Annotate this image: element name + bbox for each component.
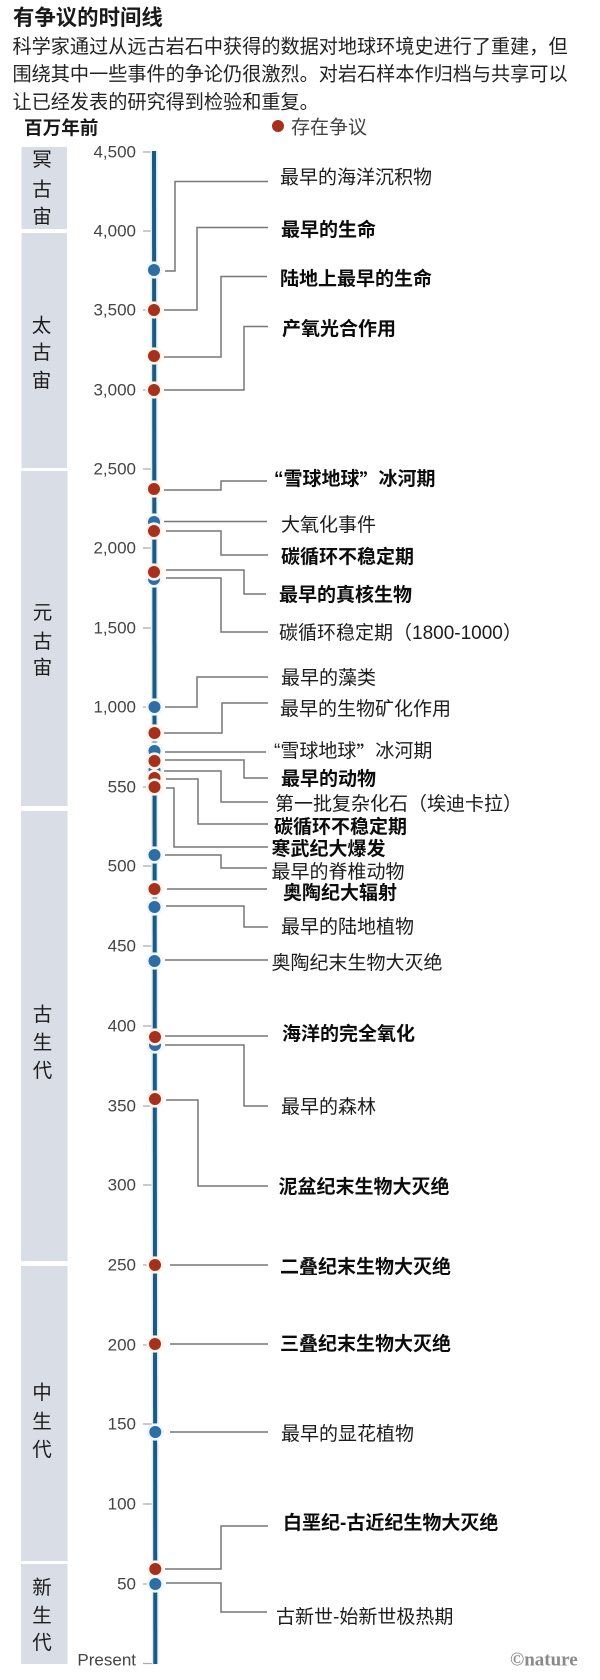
- event: great oxidation: 大氧化事件: [281, 514, 376, 536]
- time axis with ticks: 400: [108, 1016, 136, 1036]
- event: earliest forests: [165, 1045, 376, 1118]
- event: earliest vertebrates: 最早的脊椎动物: [272, 861, 405, 883]
- era: Hadean: 古: [32, 179, 52, 201]
- event: earliest vertebrates: [165, 855, 405, 883]
- event: Cambrian explosion: [166, 788, 386, 860]
- era: Mesozoic: 代: [32, 1439, 52, 1461]
- title: 有争议的时间线: [13, 6, 163, 30]
- era: Cenozoic: 新: [32, 1577, 52, 1599]
- event: oxygenic photosynthesis: 产氧光合作用: [282, 318, 396, 340]
- event: PETM: [166, 1583, 453, 1628]
- intro text: 让已经发表的研究得到检验和重复。: [12, 92, 319, 114]
- time axis with ticks: 500: [108, 856, 136, 876]
- era: Archean: 古: [32, 342, 51, 364]
- time axis with ticks: 1,500: [93, 618, 136, 638]
- event: end-Permian extinction: 二叠纪末生物大灭绝: [280, 1255, 451, 1278]
- era: Paleozoic: [21, 811, 68, 1261]
- event: earliest forests: 最早的森林: [281, 1096, 376, 1118]
- time axis with ticks: Present: [77, 1650, 136, 1670]
- event: earliest animals: [165, 760, 376, 790]
- era: Archean: 太: [32, 315, 51, 337]
- event: earliest flowering plants: 最早的显花植物: [281, 1423, 414, 1445]
- intro text: 科学家通过从远古岩石中获得的数据对地球环境史进行了重建，但: [12, 36, 568, 58]
- event: oxygenic photosynthesis: [164, 318, 396, 390]
- event: end-Triassic extinction: 三叠纪末生物大灭绝: [280, 1332, 451, 1355]
- event: earliest life on land: [164, 267, 432, 357]
- event: first complex fossils: 第一批复杂化石（埃迪卡拉）: [275, 793, 522, 815]
- time axis with ticks: 150: [108, 1414, 136, 1434]
- era: Archean: [22, 233, 67, 468]
- time axis with ticks: 3,000: [93, 380, 136, 400]
- event: PETM: 古新世-始新世极热期: [276, 1606, 453, 1628]
- time axis with ticks: 4,500: [93, 142, 136, 162]
- era: Paleozoic: 生: [33, 1032, 52, 1054]
- event: snowball earth 1: [164, 466, 436, 493]
- axis heading: 百万年前: [24, 118, 98, 138]
- event: K-Pg extinction: [165, 1511, 498, 1569]
- time axis with ticks: 350: [108, 1096, 136, 1116]
- time axis with ticks: 100: [108, 1494, 136, 1514]
- event: snowball earth 2: “雪球地球”冰河期: [274, 738, 432, 765]
- time axis with ticks: 450: [108, 936, 136, 956]
- era: Cenozoic: [21, 1564, 68, 1664]
- time axis with ticks: 250: [108, 1256, 136, 1274]
- event: earliest biomineralization: [164, 698, 451, 733]
- event: K-Pg extinction: 白垩纪-古近纪生物大灭绝: [283, 1511, 498, 1534]
- event: carbon cycle instability 2: [166, 779, 407, 838]
- era: Cenozoic: 代: [32, 1632, 52, 1654]
- event: earliest land plants: 最早的陆地植物: [281, 916, 414, 938]
- time axis with ticks: 3,500: [93, 300, 136, 320]
- event: carbon cycle stability: 碳循环稳定期（1800-1000）: [279, 622, 522, 644]
- era: Mesozoic: [21, 1266, 68, 1561]
- era: Paleozoic: 代: [33, 1060, 52, 1082]
- time axis with ticks: 50: [117, 1574, 136, 1594]
- time axis with ticks: 2,500: [93, 460, 136, 478]
- era: Cenozoic: 生: [32, 1605, 52, 1627]
- event: earliest ocean sediments: [165, 166, 432, 271]
- event: carbon cycle instability 1: 碳循环不稳定期: [281, 545, 414, 568]
- era: Proterozoic: 古: [33, 631, 52, 653]
- event markers: [147, 263, 163, 1591]
- event: full ocean oxygenation: 海洋的完全氧化: [282, 1022, 415, 1045]
- event: Ordovician radiation: 奥陶纪大辐射: [283, 881, 397, 904]
- time axis with ticks: 4,000: [93, 222, 136, 240]
- era: Hadean: 宙: [32, 206, 52, 228]
- time axis with ticks: 1,000: [93, 698, 136, 716]
- event: earliest biomineralization: 最早的生物矿化作用: [280, 698, 451, 720]
- time axis with ticks: 300: [108, 1176, 136, 1194]
- era: Proterozoic: [21, 471, 68, 806]
- time axis with ticks: 2,000: [93, 538, 136, 558]
- event: earliest algae: 最早的藻类: [281, 667, 376, 689]
- event: earliest animals: 最早的动物: [281, 768, 376, 790]
- legend: disputed: 存在争议: [291, 116, 367, 138]
- event: carbon cycle instability 1: [166, 531, 414, 568]
- event: earliest life on land: 陆地上最早的生命: [280, 267, 432, 290]
- intro text: 围绕其中一些事件的争论仍很激烈。对岩石样本作归档与共享可以: [12, 64, 568, 86]
- event: earliest algae: [165, 667, 376, 707]
- event: earliest life: 最早的生命: [281, 218, 376, 241]
- event: earliest land plants: [166, 906, 414, 938]
- event: Cambrian explosion: 寒武纪大爆发: [272, 837, 386, 860]
- time axis with ticks: 550: [108, 778, 136, 796]
- event: carbon cycle instability 2: 碳循环不稳定期: [274, 815, 407, 838]
- era: Mesozoic: 生: [32, 1411, 52, 1433]
- event: end-Ordovician extinction: 奥陶纪末生物大灭绝: [272, 952, 443, 974]
- event: earliest eukaryotes: [166, 570, 412, 606]
- era: Proterozoic: 宙: [33, 657, 52, 679]
- credit: nature: ©nature: [510, 1650, 578, 1670]
- event: earliest ocean sediments: 最早的海洋沉积物: [280, 166, 432, 188]
- event: earliest life: [164, 218, 376, 310]
- era: Paleozoic: 古: [33, 1004, 52, 1026]
- event: first complex fossils: [164, 771, 522, 815]
- event: end-Devonian extinction: 泥盆纪末生物大灭绝: [278, 1175, 450, 1198]
- era: Hadean: 冥: [32, 149, 52, 171]
- time axis with ticks: 200: [108, 1336, 136, 1354]
- era: Mesozoic: 中: [32, 1382, 52, 1404]
- event: snowball earth 1: “雪球地球”冰河期: [274, 466, 436, 493]
- era: Archean: 宙: [32, 370, 51, 392]
- event: end-Devonian extinction: [166, 1100, 450, 1198]
- era: Hadean: [22, 147, 67, 229]
- era bands: [21, 147, 68, 1664]
- era: Proterozoic: 元: [33, 602, 52, 624]
- event: earliest eukaryotes: 最早的真核生物: [279, 583, 412, 606]
- event: carbon cycle stability: [166, 578, 522, 644]
- intro text: [12, 36, 568, 114]
- time axis with ticks: [77, 142, 155, 1670]
